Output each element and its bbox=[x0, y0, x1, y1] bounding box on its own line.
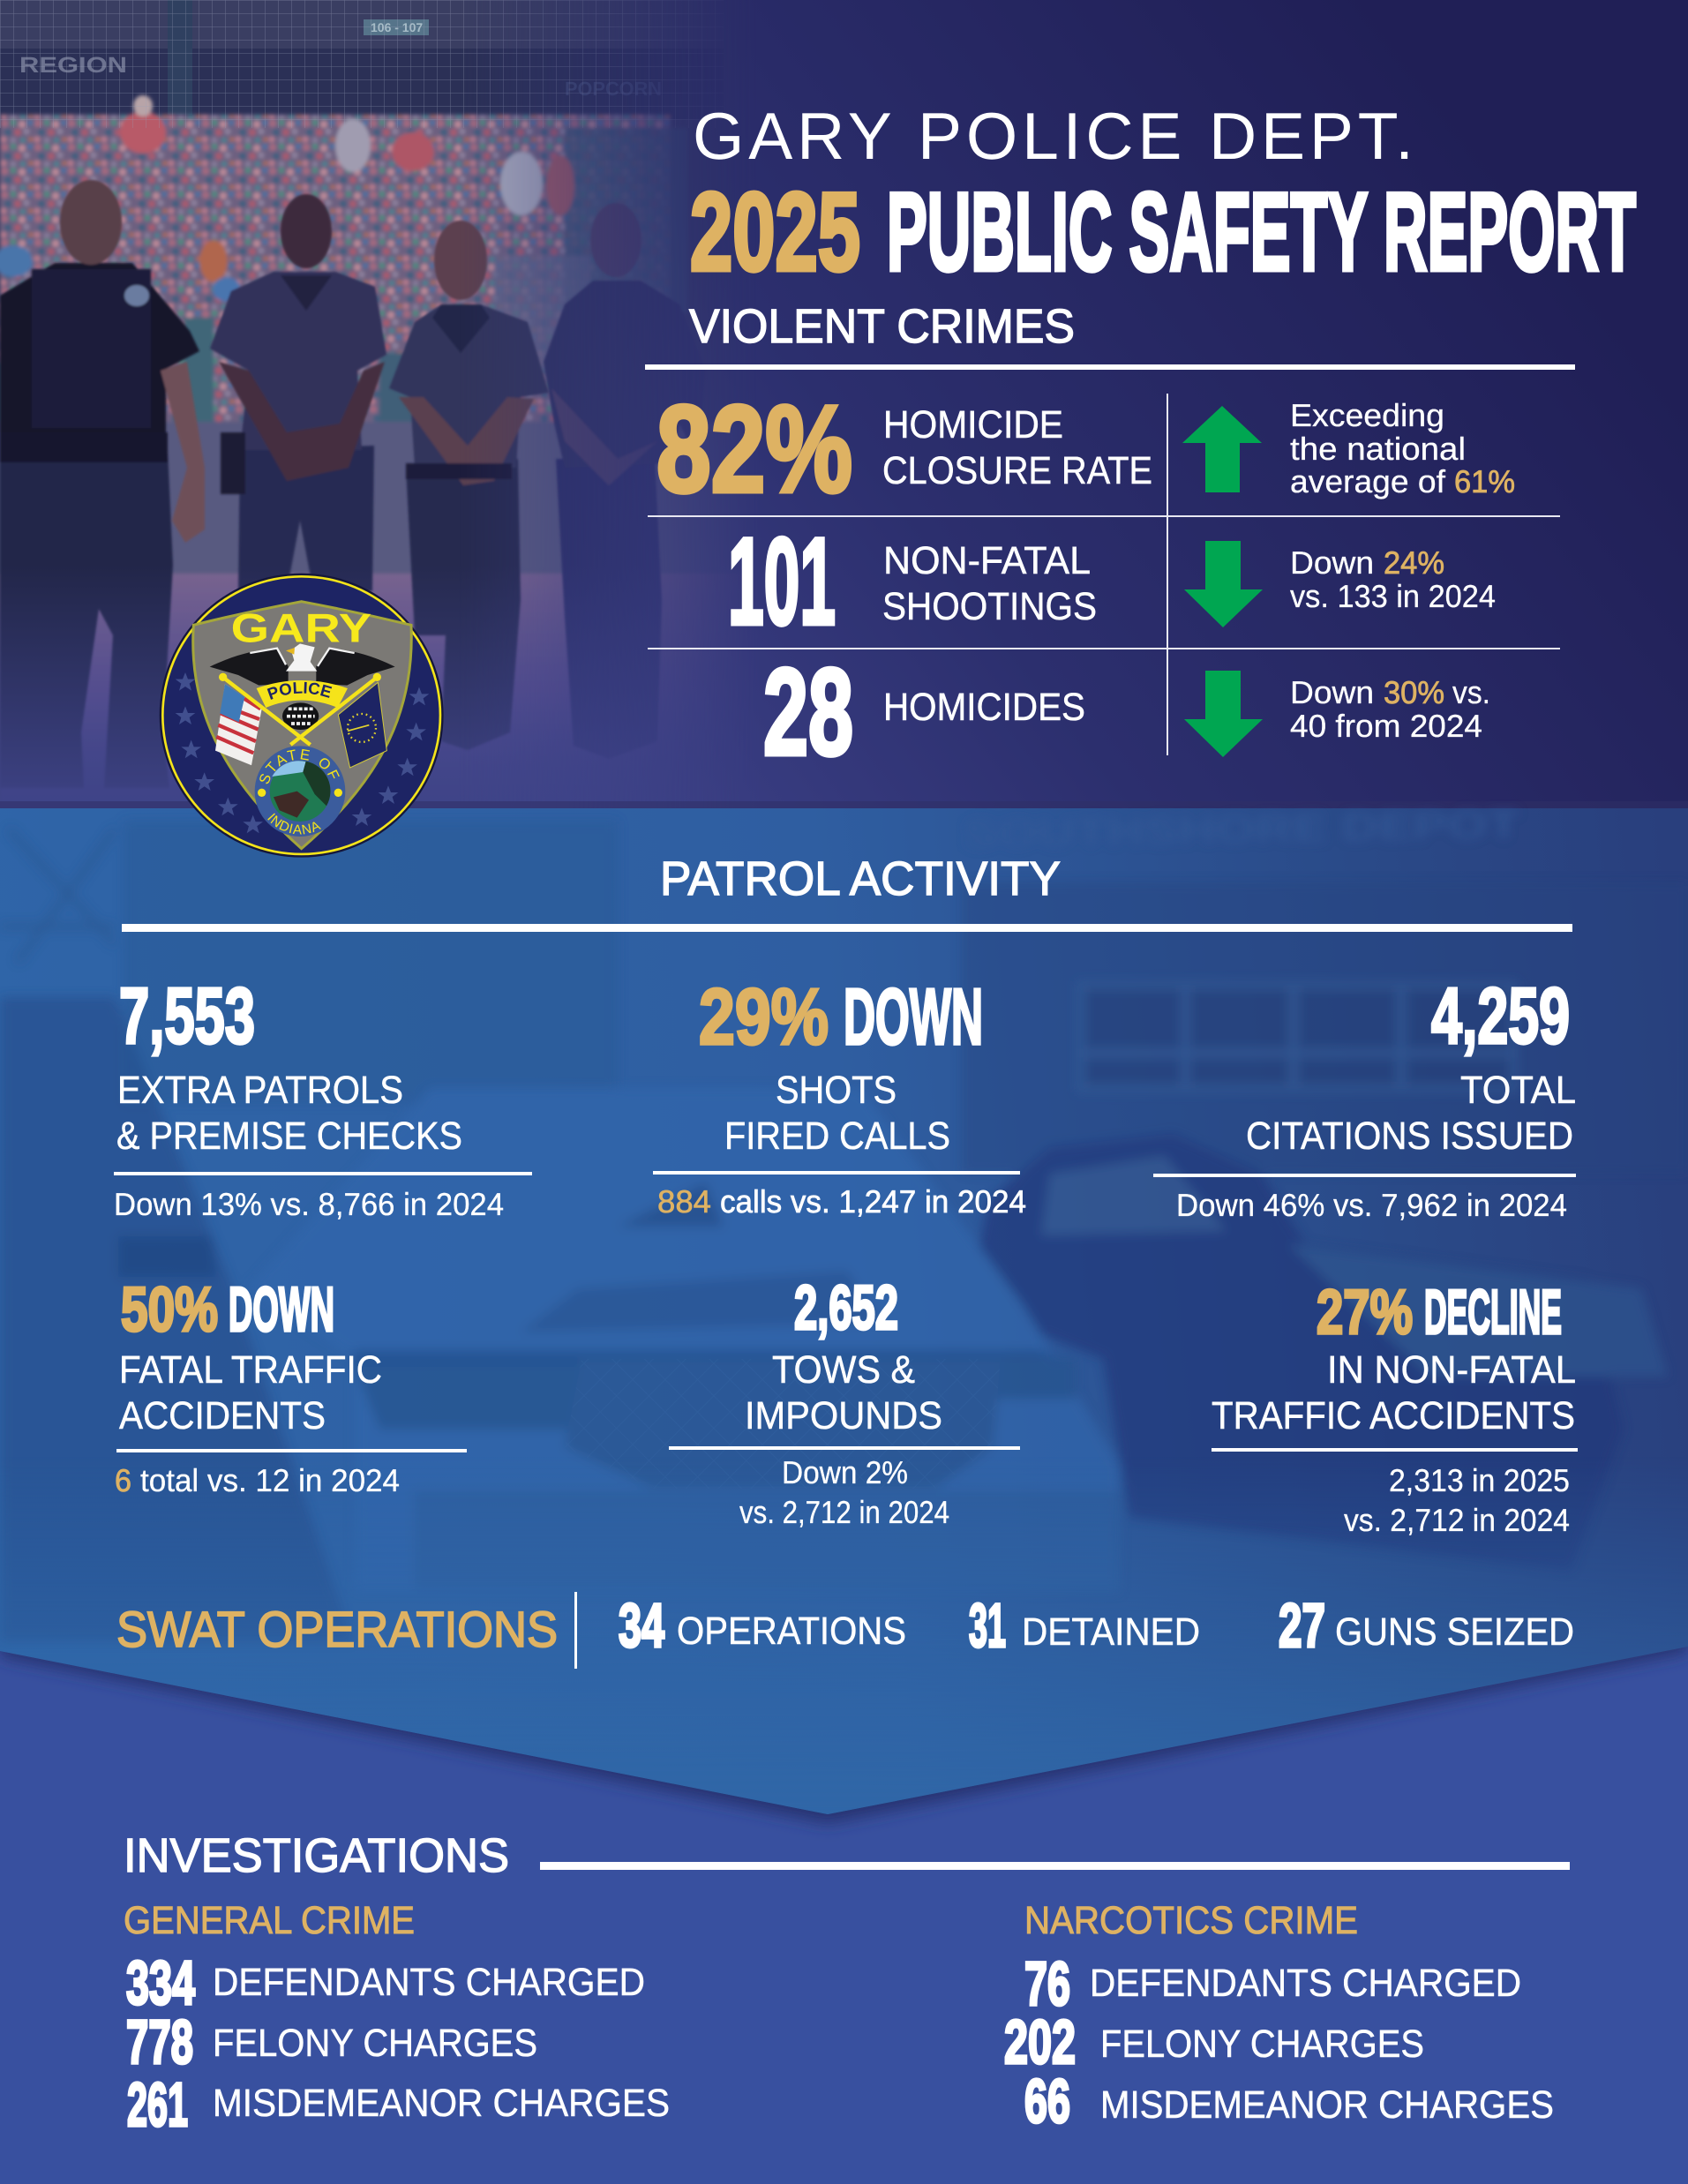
photo: officers at ballpark: POPCORN bbox=[565, 78, 662, 100]
stat: shots fired: calls vs. 1,247 in 2024 bbox=[720, 1183, 1026, 1220]
column: general crime: 261 bbox=[127, 2070, 188, 2139]
column: narcotics crime: MISDEMEANOR CHARGES bbox=[1100, 2083, 1554, 2127]
stat: fatal traffic accidents: DOWN bbox=[229, 1275, 334, 1345]
column: narcotics crime: NARCOTICS CRIME bbox=[1024, 1899, 1358, 1942]
stat: fatal traffic accidents: ACCIDENTS bbox=[119, 1394, 326, 1437]
stat: shots fired bbox=[653, 973, 1026, 1220]
chevron shadow bbox=[0, 1632, 1688, 1823]
faded car and depot photo: SOUTHSHORE DEPOT bbox=[963, 803, 1519, 856]
stat: citations: 4,259 bbox=[1431, 972, 1570, 1061]
column: narcotics crime: 66 bbox=[1024, 2067, 1070, 2135]
note: exceeding national average bbox=[1290, 397, 1515, 499]
badge word GARY: GARY bbox=[231, 605, 371, 650]
stat: citations: TOTAL bbox=[1460, 1069, 1576, 1112]
stat: non-fatal traffic accidents: IN NON-FATAL bbox=[1327, 1348, 1576, 1392]
column: general crime: FELONY CHARGES bbox=[213, 2022, 537, 2065]
stat: non-fatal shootings: SHOOTINGS bbox=[882, 585, 1097, 628]
column: narcotics crime: DEFENDANTS CHARGED bbox=[1090, 1962, 1521, 2005]
stat: homicide closure rate: HOMICIDE bbox=[883, 403, 1063, 447]
stat: homicide closure rate: CLOSURE RATE bbox=[882, 449, 1152, 492]
panel: top photo and violent crimes backdrop bbox=[0, 0, 1688, 808]
stat: extra patrols: 7,553 bbox=[119, 972, 255, 1061]
stat: shots fired: 29% bbox=[699, 973, 829, 1062]
note: exceeding national average: Exceeding bbox=[1290, 397, 1444, 433]
note: homicides change: 30% bbox=[1384, 674, 1444, 710]
stat: non-fatal traffic accidents: vs. 2,712 in 2024 bbox=[1344, 1502, 1570, 1538]
stat: shots fired: FIRED CALLS bbox=[724, 1115, 950, 1158]
stat: guns seized bbox=[1279, 1591, 1574, 1660]
stat: detained: 31 bbox=[969, 1591, 1006, 1660]
heading: patrol activity bbox=[122, 852, 1572, 932]
stat: homicides: HOMICIDES bbox=[883, 686, 1085, 729]
column: general crime: GENERAL CRIME bbox=[124, 1899, 415, 1942]
column: narcotics crime: FELONY CHARGES bbox=[1100, 2023, 1424, 2066]
stat: tows and impounds bbox=[669, 1273, 1020, 1530]
stat: non-fatal traffic accidents: 27% bbox=[1317, 1278, 1413, 1347]
badge POLICE banner bbox=[256, 680, 348, 708]
column: narcotics crime: 76 bbox=[1024, 1949, 1070, 2018]
note: exceeding national average: average of bbox=[1290, 463, 1446, 499]
stat: tows and impounds: 2,652 bbox=[794, 1273, 898, 1343]
stat: tows and impounds: vs. 2,712 in 2024 bbox=[739, 1494, 949, 1530]
column: general crime bbox=[124, 1899, 670, 2139]
stat: detained: DETAINED bbox=[1022, 1610, 1200, 1654]
column: general crime: 778 bbox=[126, 2008, 193, 2076]
heading: SWAT operations: SWAT OPERATIONS bbox=[116, 1602, 558, 1658]
panel: patrol activity backdrop bbox=[0, 803, 1688, 1823]
stat: fatal traffic accidents bbox=[115, 1275, 467, 1498]
stat: citations: CITATIONS ISSUED bbox=[1246, 1115, 1573, 1158]
officer one bbox=[0, 180, 205, 788]
stat: fatal traffic accidents: 6 bbox=[115, 1462, 131, 1498]
note: homicides change: vs. bbox=[1452, 674, 1490, 710]
stat: fatal traffic accidents: 50% bbox=[121, 1275, 218, 1345]
stat: citations bbox=[1153, 972, 1576, 1223]
title: department name: GARY POLICE DEPT. bbox=[693, 99, 1414, 173]
officer four bbox=[544, 203, 706, 759]
column: general crime: 334 bbox=[126, 1948, 195, 2017]
stat: extra patrols: Down 13% vs. 8,766 in 2024 bbox=[114, 1186, 504, 1222]
stat: shots fired: SHOTS bbox=[776, 1069, 897, 1112]
heading: investigations: INVESTIGATIONS bbox=[124, 1829, 509, 1882]
note: homicides change: 40 from 2024 bbox=[1290, 708, 1482, 744]
stat: citations: Down 46% vs. 7,962 in 2024 bbox=[1176, 1187, 1567, 1223]
officer three bbox=[389, 221, 549, 750]
stat: non-fatal shootings bbox=[728, 512, 1097, 650]
stat: guns seized: GUNS SEIZED bbox=[1335, 1610, 1574, 1654]
heading: investigations bbox=[124, 1829, 1570, 1882]
column: general crime: MISDEMEANOR CHARGES bbox=[213, 2082, 670, 2125]
stat: fatal traffic accidents: total vs. 12 in 2024 bbox=[140, 1462, 400, 1498]
stat: tows and impounds: Down 2% bbox=[782, 1454, 908, 1490]
badge POLICE banner: POLICE bbox=[266, 681, 332, 700]
chevron section bbox=[0, 808, 1688, 1814]
badge: Gary Police patch bbox=[159, 574, 444, 858]
stat: shots fired: DOWN bbox=[844, 973, 983, 1062]
stat: non-fatal shootings: 101 bbox=[728, 512, 836, 650]
column: narcotics crime: 202 bbox=[1004, 2008, 1076, 2076]
badge shield bbox=[193, 602, 411, 849]
stat: operations: 34 bbox=[619, 1591, 664, 1660]
stat: guns seized: 27 bbox=[1279, 1591, 1325, 1660]
stat: tows and impounds: TOWS & bbox=[772, 1348, 915, 1392]
icon: up arrow bbox=[1182, 406, 1262, 492]
photo: officers at ballpark bbox=[0, 0, 882, 808]
badge state seal: STATE OF bbox=[259, 748, 340, 784]
row separators bbox=[648, 394, 1560, 755]
badge state seal: INDIANA bbox=[267, 814, 321, 835]
photo: officers at ballpark: 106 - 107 bbox=[371, 20, 423, 34]
heading: violent crimes bbox=[645, 300, 1575, 370]
badge flags bbox=[215, 673, 386, 768]
stat: non-fatal shootings: NON-FATAL bbox=[883, 539, 1091, 582]
note: exceeding national average: 61% bbox=[1454, 463, 1515, 499]
note: homicides change bbox=[1290, 674, 1490, 744]
note: shootings change: vs. 133 in 2024 bbox=[1290, 578, 1496, 614]
heading: violent crimes: VIOLENT CRIMES bbox=[689, 300, 1075, 353]
stat: non-fatal traffic accidents bbox=[1212, 1278, 1578, 1538]
stat: homicide closure rate: 82% bbox=[656, 379, 852, 518]
stat: homicide closure rate bbox=[656, 379, 1152, 518]
divider bbox=[574, 1592, 577, 1669]
stat: operations bbox=[619, 1591, 906, 1660]
note: homicides change: Down bbox=[1290, 674, 1374, 710]
background gradient overlay bbox=[484, 0, 882, 801]
panel: patrol activity bbox=[114, 852, 1578, 1669]
column: narcotics crime bbox=[1004, 1899, 1554, 2135]
panel: violent crimes bbox=[645, 300, 1575, 781]
title: year: 2025 bbox=[690, 169, 860, 294]
stat: homicides bbox=[763, 642, 1085, 781]
note: shootings change bbox=[1290, 544, 1496, 614]
stat: extra patrols: EXTRA PATROLS bbox=[117, 1069, 403, 1112]
stat: fatal traffic accidents: FATAL TRAFFIC bbox=[119, 1348, 382, 1392]
note: exceeding national average: the national bbox=[1290, 431, 1466, 467]
panel: investigations bbox=[124, 1829, 1570, 2139]
note: shootings change: 24% bbox=[1384, 544, 1444, 581]
faded car and depot photo bbox=[0, 803, 1688, 1641]
title block bbox=[690, 99, 1636, 294]
column: general crime: DEFENDANTS CHARGED bbox=[213, 1961, 645, 2004]
stat: detained bbox=[969, 1591, 1200, 1660]
panel: SWAT operations bbox=[116, 1591, 1574, 1669]
stat: homicides: 28 bbox=[763, 642, 853, 781]
stat: tows and impounds: IMPOUNDS bbox=[745, 1394, 942, 1437]
stat: extra patrols bbox=[114, 972, 532, 1222]
heading: patrol activity: PATROL ACTIVITY bbox=[660, 852, 1061, 905]
badge eagle bbox=[210, 643, 395, 730]
icon: down arrow bbox=[1184, 671, 1263, 757]
officer two bbox=[210, 194, 386, 591]
stat: operations: OPERATIONS bbox=[677, 1610, 906, 1653]
icon: down arrow bbox=[1184, 541, 1263, 627]
badge state seal bbox=[254, 746, 346, 837]
stat: shots fired: 884 bbox=[657, 1183, 711, 1220]
stat: non-fatal traffic accidents: TRAFFIC ACCIDENTS bbox=[1212, 1394, 1575, 1437]
stat: non-fatal traffic accidents: 2,313 in 2025 bbox=[1389, 1462, 1570, 1498]
stat: extra patrols: & PREMISE CHECKS bbox=[116, 1115, 462, 1158]
note: shootings change: Down bbox=[1290, 544, 1374, 581]
photo: officers at ballpark: REGION bbox=[19, 53, 127, 78]
